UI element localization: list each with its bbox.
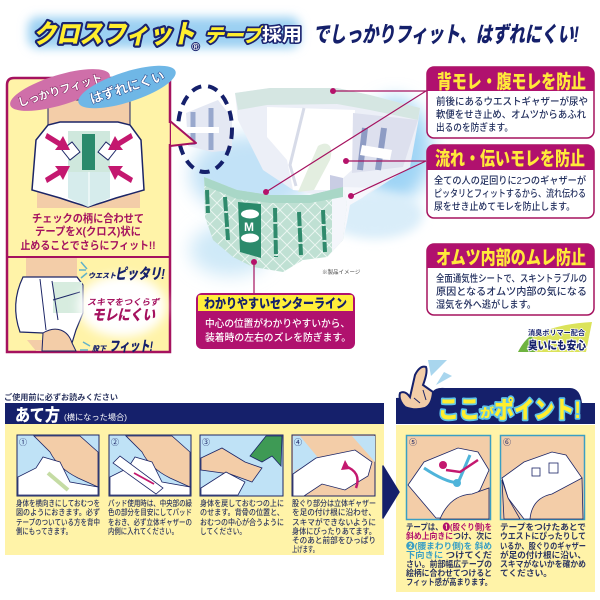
panel: key point bbox=[396, 360, 595, 592]
title: cross fit: クロスフィット bbox=[33, 19, 195, 49]
step 6: ⑥ bbox=[503, 438, 511, 447]
step 1: テープのついている方を背中 bbox=[16, 517, 100, 527]
title glow bbox=[28, 17, 300, 48]
center band bbox=[238, 202, 261, 258]
step 5 bbox=[406, 436, 493, 587]
step 6 text: が足の付け根に沿い、 bbox=[500, 550, 586, 560]
step 6 text bbox=[500, 522, 586, 578]
no gap label: スキマをつくらず bbox=[87, 297, 161, 307]
badge: odor bbox=[518, 322, 592, 352]
box 3 bbox=[427, 244, 594, 315]
step 2: パッド使用時は、中央部の緑 bbox=[108, 498, 192, 508]
leg fit label: フィット! bbox=[109, 338, 153, 354]
caption: チェックの柄に合わせて bbox=[32, 211, 144, 225]
leg fit label bbox=[92, 338, 153, 354]
leg fit label: 股下 bbox=[92, 345, 108, 353]
front panel bbox=[204, 177, 347, 272]
heading: ポイント! bbox=[494, 397, 581, 424]
step 6 text: いるか、股ぐりのギャザー bbox=[500, 541, 586, 551]
label blue bbox=[74, 57, 180, 117]
diaper illustration bbox=[190, 88, 431, 276]
step 4: スキマができないように bbox=[292, 517, 376, 527]
body 1: 出るのを防ぎます。 bbox=[436, 121, 513, 134]
heading: ここ bbox=[438, 396, 480, 424]
step 5 text: 斜め上向きにつけ、次に bbox=[406, 531, 492, 541]
lower right ruffle bbox=[343, 187, 375, 240]
center gather bbox=[290, 108, 304, 186]
right wing bbox=[352, 113, 418, 173]
white glow bbox=[78, 275, 166, 337]
image note: ※製品イメージ bbox=[322, 268, 361, 276]
body: 中心の位置がわかりやすいから、 bbox=[205, 317, 350, 330]
body bbox=[205, 317, 351, 344]
step 2: 色の部分を目安にしてパッド bbox=[108, 507, 192, 517]
step 1: 身体を横向きにしておむつを bbox=[16, 498, 100, 508]
body 2: 全ての人の足回りに2つのギャザーが bbox=[434, 174, 586, 187]
step 5: ⑤ bbox=[409, 438, 417, 447]
step 5 text: ❷(腰まわり側)を 斜め bbox=[406, 541, 492, 551]
caption bbox=[20, 211, 156, 252]
right tape bbox=[360, 145, 392, 160]
header bar bbox=[5, 403, 384, 424]
divider bbox=[8, 256, 170, 258]
caption: テープをX(クロス)状に bbox=[35, 224, 141, 238]
step 1 bbox=[16, 435, 100, 536]
step 5 text: テープは、❶(股ぐり側)を bbox=[406, 522, 492, 532]
detail tape wing bbox=[186, 100, 232, 152]
registered mark: ® bbox=[192, 42, 200, 53]
waist fit label: ウエスト bbox=[88, 272, 116, 280]
step 3: のせます。背骨の位置と、 bbox=[200, 507, 284, 517]
step 5 text: フィット感が高まります。 bbox=[406, 577, 492, 587]
step 5 text: さい。前部幅広テープの bbox=[406, 559, 492, 569]
title: tape: テープ bbox=[204, 25, 266, 47]
step 4: 身体にぴったりあてます。 bbox=[292, 526, 376, 536]
dashed zoom circle bbox=[178, 86, 232, 172]
step 6 text: てください。 bbox=[500, 568, 552, 578]
heading bbox=[438, 396, 581, 424]
step 1: ① bbox=[19, 438, 27, 447]
step 4: 股ぐり部分は立体ギャザー bbox=[292, 498, 376, 508]
label pink: しっかりフィット bbox=[16, 71, 104, 110]
green stripes bbox=[207, 190, 325, 257]
step 5 text: 絵柄に合わせてつけると bbox=[406, 568, 492, 578]
panel background bbox=[396, 425, 595, 592]
step 4 bbox=[292, 435, 376, 554]
panel: how to apply bbox=[5, 403, 384, 555]
back waistband bbox=[235, 88, 420, 120]
illustration: side view bbox=[16, 258, 83, 351]
body 1 bbox=[436, 95, 588, 134]
panel: leg leak bbox=[427, 145, 594, 218]
body 2: 尿をせき止めてモレを防止します。 bbox=[434, 200, 575, 213]
subheading: (横になった場合) bbox=[64, 412, 127, 422]
heading: わかりやすいセンターライン bbox=[204, 296, 347, 311]
step 4: ④ bbox=[294, 438, 302, 447]
blue ticks bbox=[79, 262, 90, 350]
step 1: 側にもってきます。 bbox=[16, 526, 72, 536]
illustration: taped diaper front bbox=[32, 100, 144, 208]
body 1: 軟便をせき止め、オムツからあふれ bbox=[436, 108, 586, 121]
header band bbox=[396, 388, 595, 424]
heading: あて方 bbox=[15, 405, 60, 425]
box 1 bbox=[427, 67, 594, 138]
white side bbox=[327, 187, 347, 257]
title: adopted: 採用 bbox=[262, 25, 302, 45]
body 1: 前後にあるウエストギャザーが尿や bbox=[436, 95, 588, 108]
step 6 text: ウエストにぴったりして bbox=[500, 531, 586, 541]
box 2 bbox=[427, 145, 594, 218]
back sheet bbox=[235, 88, 420, 200]
panel: back and belly leak bbox=[427, 67, 594, 138]
step 6 text: スキマがないかを確かめ bbox=[500, 559, 586, 569]
body: 装着時の左右のズレを防ぎます。 bbox=[205, 331, 351, 344]
badge: odor: 消臭ポリマー配合 bbox=[528, 328, 585, 337]
panel background bbox=[7, 78, 170, 352]
leak label: モレにくい bbox=[92, 307, 156, 324]
panel: stuffiness bbox=[427, 244, 594, 315]
step 4: を足の付け根に沿わせ、 bbox=[292, 507, 376, 517]
step 4: そのあと前部をひっぱり bbox=[292, 535, 376, 545]
step 2: をおき、必ず立体ギャザーの bbox=[108, 517, 192, 527]
label blue: はずれにくい bbox=[88, 68, 166, 107]
step 2 bbox=[108, 435, 192, 536]
step 2: ② bbox=[111, 438, 119, 447]
arrow bbox=[383, 466, 399, 518]
step 5 text bbox=[406, 522, 493, 587]
panel: cross fit usage bbox=[6, 57, 196, 354]
caption: 止めることでさらにフィット!! bbox=[20, 238, 156, 252]
title banner bbox=[28, 17, 579, 53]
badge: odor: 臭いにも安心 bbox=[528, 338, 586, 352]
box bbox=[196, 293, 355, 349]
body 2 bbox=[434, 174, 586, 213]
M mark: M bbox=[244, 220, 254, 234]
blue glow bbox=[359, 98, 431, 202]
label pink bbox=[6, 60, 114, 120]
step 3: おむつの中心が合うように bbox=[200, 517, 284, 527]
body 3: 湿気を外へ逃がします。 bbox=[436, 298, 536, 311]
callout: center line bbox=[196, 293, 355, 349]
step 2: 内側に入れてください。 bbox=[108, 526, 178, 536]
callout leader lines bbox=[251, 88, 426, 293]
pointer bbox=[170, 121, 196, 146]
body 3: 原因となるオムツ内部の気になる bbox=[436, 285, 587, 298]
waist fit label bbox=[88, 266, 165, 283]
waist fit label: ピッタリ! bbox=[115, 266, 165, 283]
step 3 bbox=[200, 435, 284, 536]
inner pad bbox=[267, 107, 355, 190]
heading: が bbox=[480, 405, 494, 420]
step 3: ③ bbox=[202, 438, 210, 447]
panel background bbox=[5, 424, 384, 555]
step 1: 図のようにおきます。必ず bbox=[16, 507, 100, 517]
icon: pointing hand bbox=[400, 367, 433, 409]
step 5 text: 下向きに つけてくだ bbox=[406, 550, 493, 560]
step 6 bbox=[500, 436, 586, 578]
step 6 text: テープをつけたあとで bbox=[500, 522, 586, 532]
step 4: 上げます。 bbox=[292, 544, 318, 554]
notice: ご使用前に必ずお読みください bbox=[4, 392, 118, 402]
blue rays bbox=[428, 360, 452, 385]
pink arrows bbox=[45, 133, 133, 183]
dashed ellipse bbox=[178, 86, 232, 172]
lilac inner corner bbox=[330, 175, 343, 192]
body 3 bbox=[436, 272, 587, 311]
front waistband bbox=[204, 177, 343, 203]
green pad core bbox=[298, 144, 331, 192]
step 3: してください。 bbox=[200, 527, 246, 536]
step 3: 身体を戻しておむつの上に bbox=[200, 498, 284, 508]
